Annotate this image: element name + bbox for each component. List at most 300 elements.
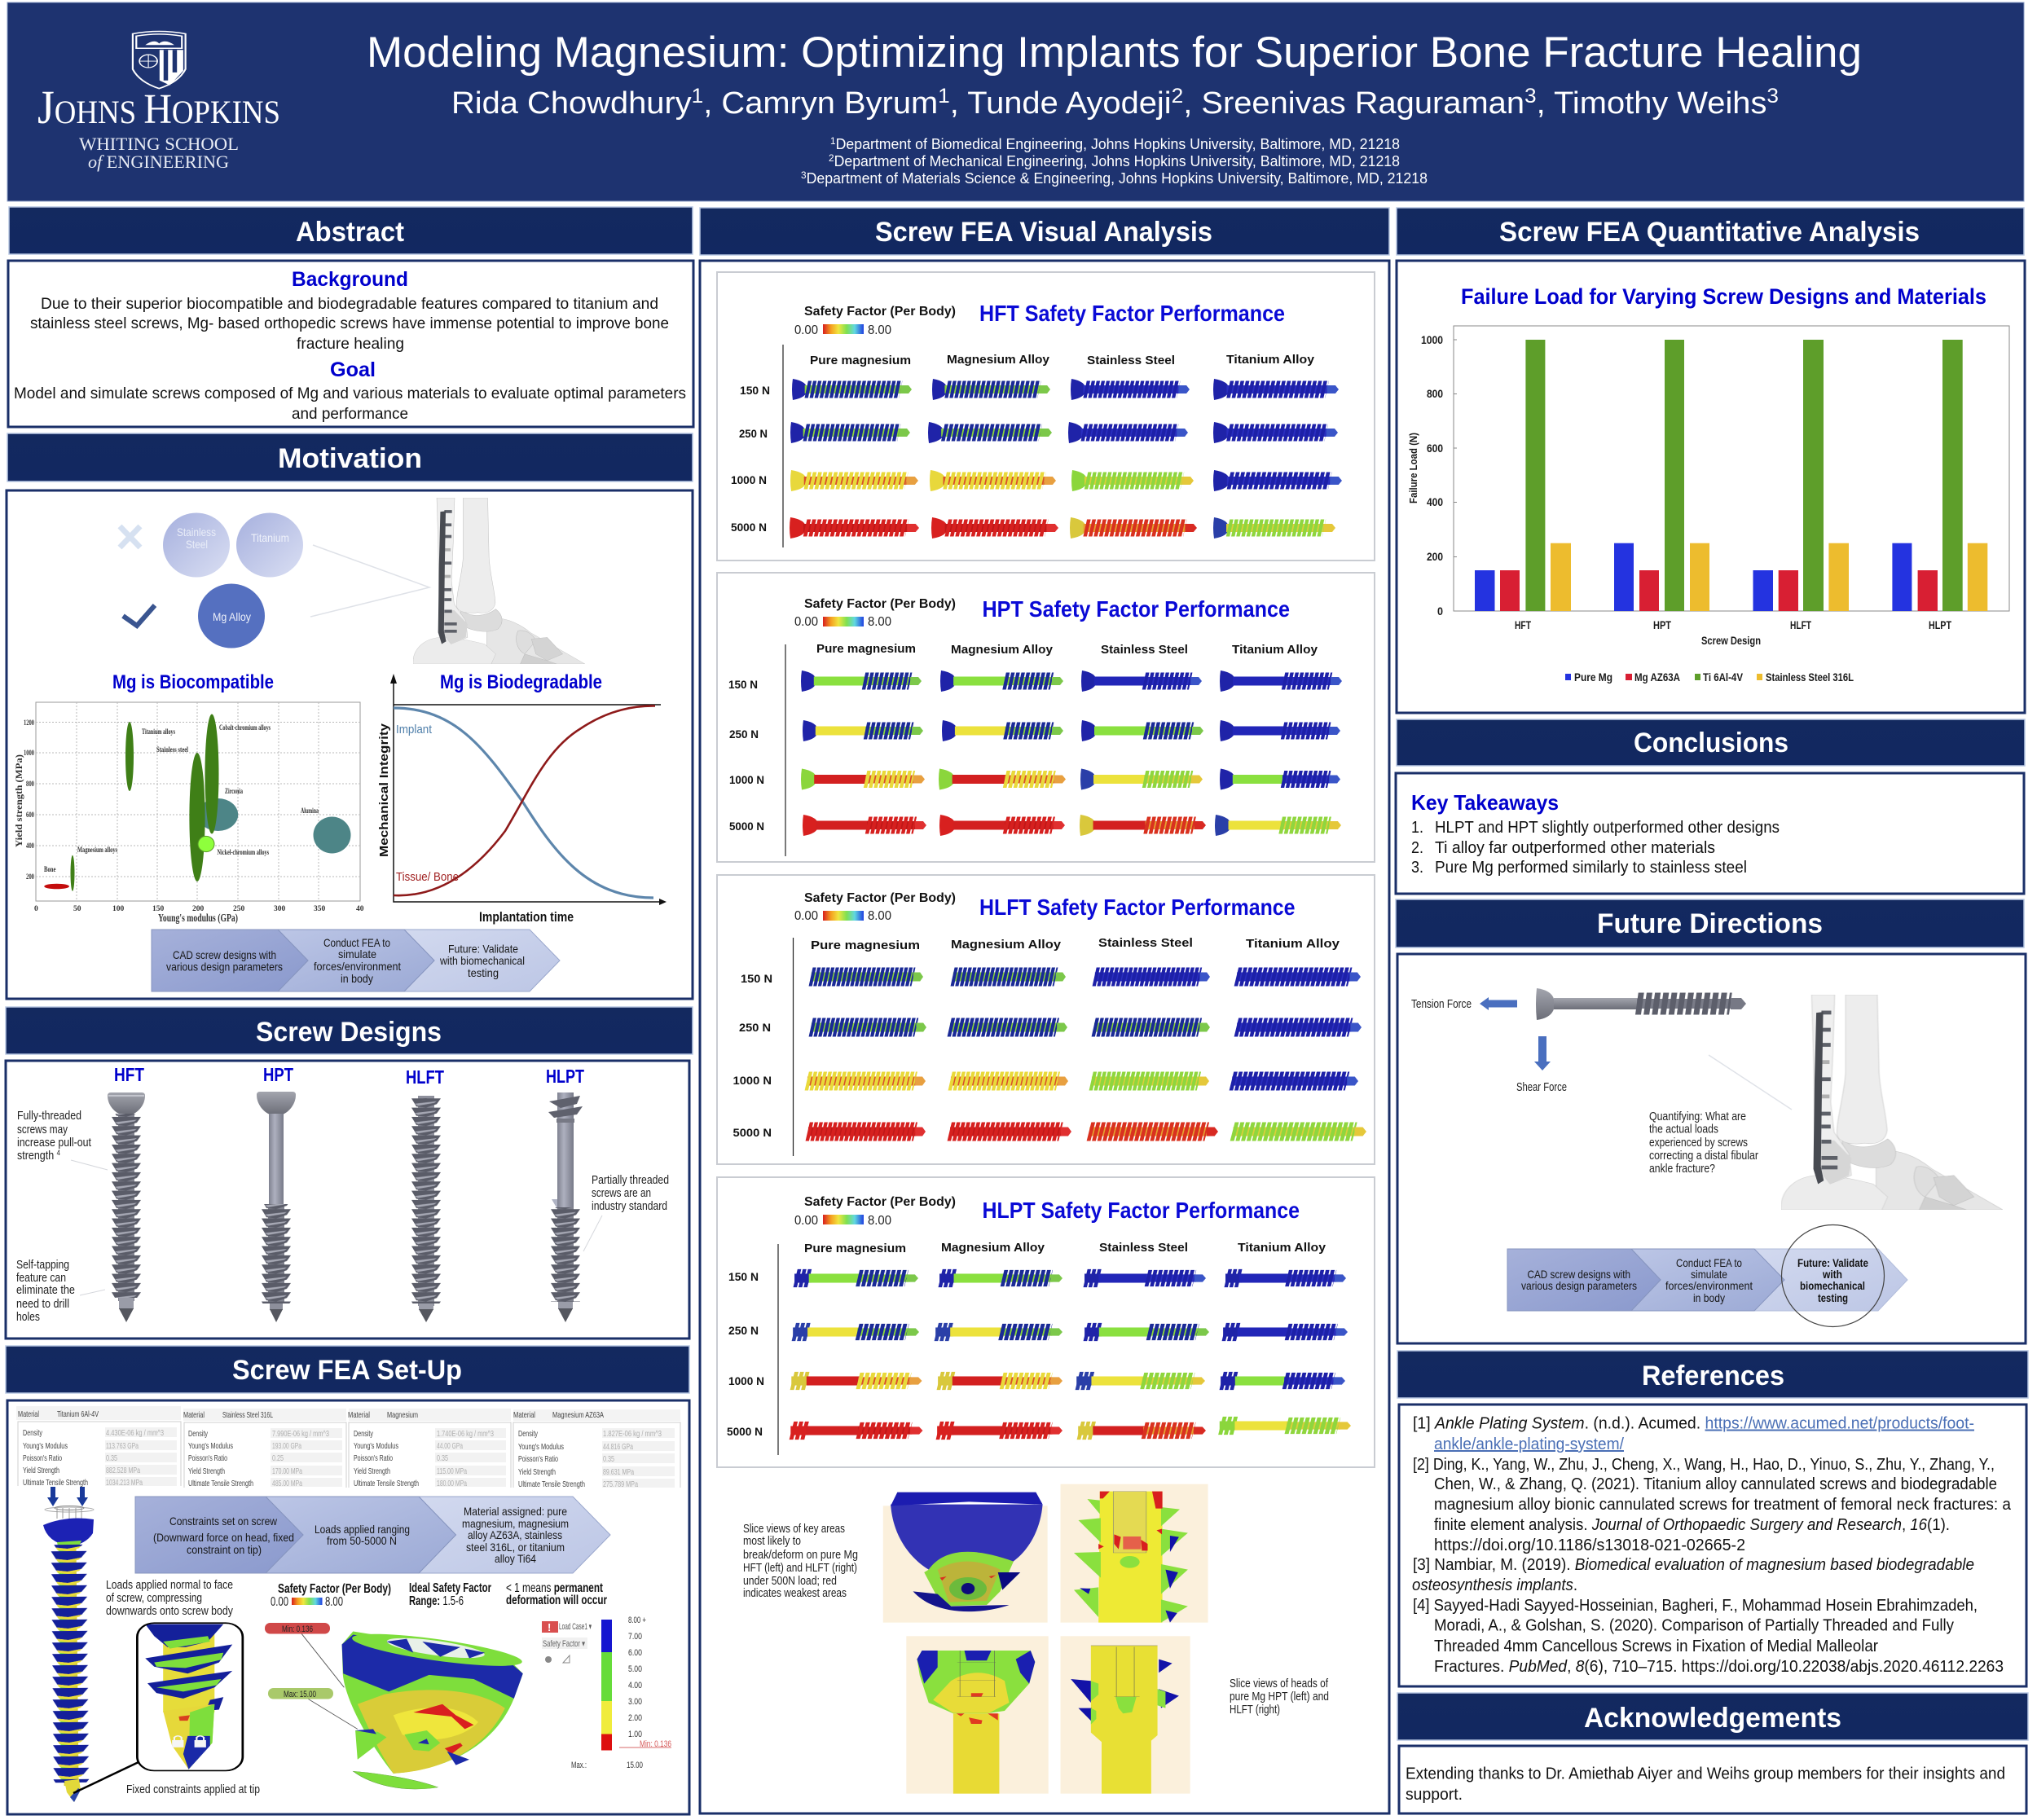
reference 4: Fractures. PubMed, 8(6), 710–715. https://doi.org/10.22038/abjs.2020.46112.2263 [1434, 1658, 2004, 1676]
chart: yield strength vs Young's modulus: 40 [356, 905, 364, 913]
process arrows with highlight: testing [1818, 1291, 1848, 1304]
screw grid [790, 379, 1342, 539]
table: stainless steel: Ultimate Tensile Strength [188, 1479, 253, 1488]
callout line [1709, 1055, 1792, 1110]
chart: failure load bars: 200 [1427, 550, 1443, 563]
table: titanium: Young's Modulus [23, 1441, 68, 1451]
chart: failure load bars: Screw Design [1701, 634, 1761, 647]
section header: Motivation: Motivation [278, 443, 422, 474]
annotation: fully-threaded: 4 [57, 1149, 60, 1157]
process arrows with highlight: biomechanical [1800, 1279, 1865, 1292]
screw grid [807, 972, 1366, 1136]
table: titanium: Material [18, 1409, 39, 1419]
legend: FEA colour scale: 2.00 [628, 1713, 642, 1723]
section header: References [1397, 1351, 2028, 1398]
icon: cross mark [120, 526, 140, 547]
legend: safety factor: 8.00 [868, 615, 891, 629]
screw: HLPT [548, 1092, 583, 1322]
legend: safety factor: Safety Factor (Per Body) [804, 597, 956, 611]
column and row labels: 250 N [728, 1325, 759, 1337]
heading: HFT Safety Factor Performance [979, 301, 1285, 326]
process arrows with highlight [1507, 1225, 1907, 1326]
table: stainless steel: Poisson's Ratio [188, 1453, 227, 1463]
process arrows: Conduct FEA to [323, 936, 390, 949]
chart: failure load bars: 800 [1427, 387, 1443, 400]
section header: Future Directions: Future Directions [1597, 908, 1823, 939]
text: quantifying question: experienced by screws [1649, 1136, 1748, 1150]
process arrows with highlight: with [1822, 1268, 1842, 1281]
affiliations: 2 [829, 152, 834, 164]
column and row labels: Titanium Alloy [1232, 644, 1318, 657]
legend: FEA colour scale: 7.00 [628, 1632, 642, 1642]
section header: References: References [1642, 1361, 1784, 1391]
text: background [30, 295, 669, 353]
text: deformation note: < 1 means permanent [506, 1581, 603, 1595]
table: stainless steel: Density [188, 1429, 209, 1439]
chart: mechanical integrity vs implantation time: Mechanical Integrity [377, 723, 391, 857]
callout lines to ankle [310, 545, 429, 617]
legend: FEA colour scale: 5.00 [628, 1664, 642, 1674]
table: stainless steel: 7.990E-06 kg / mm^3 [272, 1429, 329, 1439]
column and row labels: Titanium Alloy [1238, 1242, 1326, 1255]
text: slice views note 1: under 500N load; red [743, 1575, 837, 1588]
legend: safety factor: Safety Factor (Per Body) [278, 1582, 391, 1596]
long FEA screw [43, 1506, 94, 1802]
chart: mechanical integrity vs implantation time [377, 674, 667, 925]
sub-panel: HLPT safety factor [717, 1177, 1375, 1467]
heading: HLPT Safety Factor Performance [983, 1198, 1300, 1223]
table: magnesium: Magnesium [387, 1410, 418, 1420]
chart: yield strength vs Young's modulus: 1000 [24, 750, 34, 758]
column and row labels: Magnesium Alloy [951, 644, 1053, 657]
annotation: self-tapping: Self-tapping [16, 1259, 69, 1272]
chart: yield strength vs Young's modulus: 800 [26, 780, 34, 789]
table: magnesium: Poisson's Ratio [354, 1453, 393, 1463]
labels: screw types: HLPT [546, 1066, 584, 1087]
UI controls: load case: Safety Factor ▾ [543, 1639, 585, 1649]
table: stainless steel: Young's Modulus [188, 1441, 233, 1451]
legend: safety factor: Safety Factor (Per Body) [804, 1195, 956, 1209]
process arrows: Constraints set on screw [169, 1514, 278, 1528]
reference 3: [3] Nambiar, M. (2019). Biomedical evaluation of magnesium based biodegradable [1413, 1556, 1974, 1574]
legend: FEA colour scale: 15.00 [627, 1761, 643, 1770]
chart: failure load bars [1408, 326, 2009, 647]
list: takeaways: 3. [1411, 859, 1423, 877]
UI controls: load case: Load Case1 ▾ [559, 1622, 592, 1632]
column and row labels: 250 N [739, 428, 768, 440]
legend: safety factor: 8.00 [868, 1214, 891, 1228]
text: loads applied: Loads applied normal to face [106, 1579, 233, 1592]
heading: Mg is Biocompatible: Mg is Biocompatible [112, 671, 274, 693]
heading: Goal: Goal [330, 358, 376, 381]
text: slice views note 1: break/deform on pure Mg [743, 1549, 858, 1562]
screw: HFT [108, 1092, 145, 1322]
text: ideal safety factor: Ideal Safety Factor [409, 1581, 491, 1595]
table: stainless steel: Stainless Steel 316L [222, 1410, 273, 1420]
authors: 2 [1172, 85, 1183, 108]
table: magnesium: Density [354, 1429, 374, 1439]
legend: safety factor [271, 1582, 391, 1609]
section header: Acknowledgements: Acknowledgements [1584, 1703, 1841, 1734]
section header: Acknowledgements [1397, 1693, 2028, 1740]
chart: yield strength vs Young's modulus: 1200 [24, 719, 34, 728]
reference 3: osteosynthesis implants. [1412, 1576, 1577, 1594]
chart: yield strength vs Young's modulus: 600 [26, 811, 34, 820]
text: loads applied: downwards onto screw body [106, 1605, 234, 1618]
text: slice views note 1: most likely to [743, 1535, 801, 1548]
legend: safety factor: 8.00 [868, 323, 891, 337]
process arrows: magnesium, magnesium [462, 1517, 569, 1530]
circle: stainless steel: Steel [186, 538, 208, 551]
process arrows with highlight: forces/environment [1665, 1279, 1753, 1292]
list: takeaways: 2. [1411, 839, 1423, 857]
chart: yield strength vs Young's modulus: Titanium alloys [142, 728, 175, 736]
table: magnesium AZ63A: Yield Strength [518, 1467, 556, 1477]
table: magnesium: Ultimate Tensile Strength [354, 1479, 419, 1488]
column and row labels: 150 N [740, 385, 770, 397]
table: titanium [16, 1406, 181, 1488]
table: magnesium AZ63A: Young's Modulus [518, 1442, 564, 1452]
table: magnesium [348, 1409, 511, 1488]
circle: stainless steel [163, 513, 230, 577]
text: loads applied: of screw, compressing [106, 1592, 202, 1605]
affiliations: Department of Biomedical Engineering, Johns Hopkins University, Baltimore, MD, 21218 [836, 136, 1400, 152]
arrow: tension [1480, 997, 1517, 1010]
annotation: fully-threaded: strength [17, 1150, 59, 1163]
column and row labels [727, 1242, 1326, 1455]
legend: safety factor [794, 597, 956, 629]
logo: Johns Hopkins Whiting School of Engineering: JOHNS HOPKINS [37, 81, 280, 134]
process arrows with highlight: simulate [1691, 1268, 1727, 1281]
table: magnesium: Yield Strength [354, 1466, 390, 1476]
reference 4: Threaded 4mm Cancellous Screws in Fixation of Medial Malleolar [1434, 1638, 1878, 1655]
chart: yield strength vs Young's modulus: Zirconia [225, 788, 243, 796]
legend: materials: Mg AZ63A [1634, 670, 1680, 684]
table: stainless steel [183, 1409, 346, 1488]
legend: FEA colour scale: 8.00 + [628, 1616, 646, 1625]
text: quantifying question: correcting a distal fibular [1649, 1150, 1758, 1163]
detail: screw tip [73, 1623, 243, 1793]
legend: FEA colour scale: 4.00 [628, 1681, 642, 1690]
table: magnesium: 0.35 [437, 1453, 448, 1463]
text: slice views note 1: HFT (left) and HLFT (right) [743, 1562, 857, 1575]
chart: yield strength vs Young's modulus: Alumina [301, 807, 319, 815]
affiliations: Department of Mechanical Engineering, Johns Hopkins University, Baltimore, MD, 21218 [834, 153, 1400, 169]
chart: failure load bars: HLFT [1790, 618, 1811, 631]
affiliations: Department of Materials Science & Engineering, Johns Hopkins University, Baltimore, MD, 21218 [807, 170, 1428, 187]
labels: screw types: HLFT [406, 1066, 444, 1088]
circle: Mg alloy: Mg Alloy [213, 610, 251, 623]
text: deformation note: deformation will occur [506, 1594, 607, 1607]
chart: failure load bars: 0 [1437, 604, 1443, 618]
annotation: fully-threaded: Fully-threaded [17, 1110, 81, 1123]
table: stainless steel: Material [183, 1410, 205, 1420]
text: loads applied [106, 1579, 234, 1618]
table: titanium: Yield Strength [23, 1466, 59, 1475]
illustration: ankle plate [413, 498, 585, 664]
list: takeaways: 1. [1411, 819, 1423, 837]
text: slice views note 2: Slice views of heads of [1230, 1677, 1329, 1690]
process arrows: steel 316L, or titanium [466, 1541, 565, 1554]
process arrows: alloy Ti64 [495, 1552, 536, 1565]
section header: Conclusions [1397, 719, 2025, 766]
arrows: downward load [47, 1487, 88, 1506]
process arrows with highlight: in body [1693, 1291, 1725, 1304]
labels: screw types [114, 1064, 584, 1088]
sub-panel: HFT safety factor [717, 272, 1375, 561]
column and row labels: Magnesium Alloy [951, 939, 1061, 952]
section header: Abstract [9, 207, 693, 254]
text: goal: and performance [292, 405, 408, 423]
chart: failure load bars: 400 [1427, 495, 1443, 508]
reference 2: https://doi.org/10.1186/s13018-021-02665-2 [1434, 1536, 1745, 1554]
legend: materials [1565, 670, 1854, 684]
section header: Screw FEA Quantitative Analysis [1397, 208, 2024, 255]
column and row labels: Stainless Steel [1099, 1242, 1188, 1255]
process arrows: simulate [338, 947, 376, 961]
legend: safety factor: 0.00 [794, 323, 818, 337]
image: slice HPT head [906, 1636, 1049, 1794]
image: slice HLFT head 2 [1061, 1636, 1190, 1794]
column and row labels: Magnesium Alloy [947, 354, 1049, 367]
table: magnesium AZ63A: Density [518, 1429, 539, 1439]
process arrows with highlight: Future: Validate [1797, 1256, 1868, 1269]
table: magnesium: 115.00 MPa [437, 1466, 467, 1476]
panel: acknowledgements [1399, 1746, 2026, 1813]
section header: Screw FEA Visual Analysis [700, 208, 1389, 255]
text: ideal safety factor [409, 1581, 491, 1608]
labels: screw types: HPT [263, 1064, 293, 1085]
legend: safety factor [794, 1195, 956, 1228]
callout: min safety factor [265, 1623, 330, 1634]
legend: safety factor [794, 891, 956, 923]
chart: yield strength vs Young's modulus: 300 [274, 905, 285, 913]
table: magnesium AZ63A: Material [513, 1410, 535, 1420]
logo: Johns Hopkins Whiting School of Engineering: of ENGINEERING [88, 152, 229, 172]
chart: yield strength vs Young's modulus: 200 [192, 905, 204, 913]
column and row labels: Pure magnesium [816, 643, 916, 656]
annotation: partially threaded [583, 1174, 669, 1251]
chart: failure load bars: HLPT [1929, 618, 1951, 631]
reference 4 [1413, 1597, 2004, 1676]
column and row labels: 1000 N [731, 474, 767, 486]
chart: failure load bars: HPT [1653, 618, 1671, 631]
annotation: fully-threaded [17, 1110, 108, 1170]
circle: titanium: Titanium [251, 531, 289, 544]
legend: FEA colour scale [571, 1616, 671, 1770]
screw: HLFT [411, 1096, 442, 1322]
screw grid [801, 670, 1342, 836]
title: Modeling Magnesium: Optimizing Implants for Superior Bone Fracture Healing [367, 29, 1862, 77]
process arrows: with biomechanical [439, 954, 525, 967]
reference 1: [1] Ankle Plating System. (n.d.). Acumed. https://www.acumed.net/products/foot- [1413, 1414, 1974, 1432]
text: goal [14, 385, 686, 423]
legend: safety factor: 0.00 [794, 615, 818, 629]
UI controls: load case: ! [548, 1621, 551, 1633]
logo: Johns Hopkins Whiting School of Engineering: WHITING SCHOOL [79, 134, 239, 154]
authors: Rida Chowdhury [451, 86, 680, 121]
legend: FEA colour scale: Min: 0.136 [640, 1739, 671, 1749]
column and row labels: 150 N [741, 973, 772, 985]
column and row labels: 250 N [729, 728, 759, 741]
icon: check mark [123, 605, 155, 626]
process arrows: constraint on tip) [187, 1543, 262, 1556]
table: titanium: Ultimate Tensile Strength [23, 1478, 88, 1488]
authors: 1 [692, 85, 703, 108]
heading: Background: Background [292, 268, 408, 291]
authors: , Timothy Weihs [1537, 86, 1766, 121]
arrow: shear [1534, 1036, 1551, 1070]
legend: FEA colour scale: Max.: [571, 1761, 587, 1770]
legend: safety factor: Safety Factor (Per Body) [804, 305, 956, 319]
text: slice views note 1 [743, 1523, 858, 1600]
reference 2: finite element analysis. Journal of Orthopaedic Surgery and Research, 16(1). [1434, 1516, 1950, 1534]
column and row labels: Pure magnesium [811, 939, 920, 952]
panel: screw FEA set-up [7, 1400, 689, 1814]
section header: Future Directions [1396, 899, 2024, 947]
panel: screw designs [6, 1061, 689, 1339]
annotation: partially threaded: screws are an [592, 1187, 651, 1200]
header banner [7, 2, 2024, 201]
annotation: self-tapping: eliminate the [16, 1284, 75, 1297]
chart: yield strength vs Young's modulus: Magnesium alloys [77, 846, 117, 855]
reference 2: Chen, W., & Zhang, Q. (2021). Titanium alloy cannulated screws and biodegradable [1434, 1475, 1997, 1493]
text: deformation note [506, 1581, 607, 1607]
annotation: fully-threaded: screws may [17, 1123, 68, 1136]
column and row labels: 5000 N [731, 521, 767, 534]
table: magnesium: 44.00 GPa [437, 1441, 463, 1451]
chart: yield strength vs Young's modulus: 0 [34, 905, 38, 913]
table: titanium: 4.430E-06 kg / mm^3 [106, 1428, 164, 1438]
process arrows: alloy AZ63A, stainless [468, 1528, 562, 1541]
panel: screw FEA visual analysis [700, 261, 1389, 1813]
column and row labels: Stainless Steel [1101, 644, 1188, 657]
process arrows: forces/environment [314, 960, 401, 973]
table: stainless steel: 485.00 MPa [272, 1479, 302, 1488]
table: magnesium AZ63A: 89.631 MPa [603, 1467, 634, 1477]
chart: mechanical integrity vs implantation time: Tissue/ Bone [396, 870, 459, 884]
table: magnesium AZ63A: Ultimate Tensile Strength [518, 1479, 585, 1489]
chart: yield strength vs Young's modulus: Cobalt-chromium alloys [219, 724, 271, 732]
annotation: self-tapping [16, 1259, 105, 1324]
image: slice HLFT head [1061, 1484, 1208, 1623]
process arrows with highlight: CAD screw designs with [1527, 1268, 1630, 1281]
screw grid [790, 1273, 1351, 1435]
legend: safety factor: Safety Factor (Per Body) [804, 891, 956, 905]
heading: Mg is Biodegradable: Mg is Biodegradable [440, 671, 602, 693]
authors: 3 [1766, 85, 1779, 108]
table: titanium: 882.528 MPa [106, 1466, 140, 1475]
chart: failure load bars: 600 [1427, 442, 1443, 455]
section header: Conclusions: Conclusions [1634, 728, 1788, 758]
table: stainless steel: 193.00 GPa [272, 1441, 301, 1451]
labels: screw types: HFT [114, 1064, 144, 1085]
chart: yield strength vs Young's modulus: Stainless steel [156, 746, 188, 754]
legend: materials: Pure Mg [1574, 670, 1612, 684]
circle: Mg alloy [198, 583, 265, 648]
legend: safety factor [794, 305, 956, 337]
annotation: partially threaded: Partially threaded [592, 1174, 669, 1187]
legend: safety factor: 0.00 [271, 1595, 288, 1609]
chart: yield strength vs Young's modulus: Bone [44, 866, 55, 874]
text: background: fracture healing [297, 335, 404, 353]
section header: Screw FEA Visual Analysis: Screw FEA Visual Analysis [875, 217, 1212, 248]
column and row labels: 150 N [728, 679, 758, 691]
column and row labels [733, 937, 1340, 1156]
affiliations: 1 [830, 135, 836, 147]
sub-panel: HLFT safety factor [717, 875, 1375, 1164]
section header: Motivation [7, 433, 693, 481]
column and row labels: 5000 N [727, 1426, 763, 1438]
table: titanium: 113.763 GPa [106, 1441, 139, 1451]
callout: max safety factor: Max: 15.00 [284, 1690, 316, 1699]
image: slice HFT head [883, 1492, 1048, 1623]
list: takeaways [1411, 819, 1780, 877]
table: titanium: Poisson's Ratio [23, 1453, 62, 1463]
process arrows: Material assigned: pure [464, 1505, 567, 1518]
render: FEA of screw head [301, 1628, 526, 1789]
chart: yield strength vs Young's modulus: 50 [73, 905, 81, 913]
text: quantifying question: the actual loads [1649, 1123, 1718, 1136]
chart: yield strength vs Young's modulus: 400 [26, 842, 34, 851]
process arrows: in body [341, 972, 373, 985]
text: slice views note 2: pure Mg HPT (left) and [1230, 1690, 1329, 1704]
text: goal: Model and simulate screws composed of Mg and various materials to evaluate optimal parameters [14, 385, 686, 402]
chart: failure load bars: HFT [1515, 618, 1531, 631]
annotation: self-tapping: need to drill [16, 1298, 69, 1311]
heading: key takeaways: Key Takeaways [1411, 790, 1559, 815]
table: magnesium AZ63A: 1.827E-06 kg / mm^3 [603, 1429, 662, 1439]
chart: yield strength vs Young's modulus: 100 [112, 905, 124, 913]
legend: safety factor: 0.00 [794, 909, 818, 923]
table: titanium: Density [23, 1428, 43, 1438]
reference 2 [1413, 1456, 2012, 1554]
authors: 3 [1524, 85, 1537, 108]
chart: yield strength vs Young's modulus: 350 [314, 905, 326, 913]
panel: quantitative analysis [1397, 261, 2025, 713]
reference 4: Moradi, A., & Golshan, S. (2020). Comparison of Partially Threaded and Fully [1434, 1616, 1954, 1634]
authors: , Tunde Ayodeji [950, 86, 1172, 121]
sub-panel: HPT safety factor [717, 573, 1375, 862]
legend: materials: Ti 6Al-4V [1703, 670, 1744, 684]
chart: yield strength vs Young's modulus: Yield strength (MPa) [13, 754, 24, 847]
section header: Screw FEA Set-Up: Screw FEA Set-Up [232, 1355, 462, 1386]
callout: min safety factor: Min: 0.136 [282, 1624, 313, 1634]
column and row labels: 5000 N [733, 1127, 772, 1139]
table: magnesium: 180.00 MPa [437, 1479, 467, 1488]
text: quantifying question: ankle fracture? [1649, 1163, 1715, 1176]
column and row labels: Titanium Alloy [1246, 938, 1340, 951]
chart: yield strength vs Young's modulus: Nickel-chromium alloys [217, 849, 269, 857]
label: tension force: Tension Force [1411, 998, 1472, 1011]
panel: motivation [7, 490, 693, 999]
logo: Johns Hopkins Whiting School of Engineering [37, 32, 280, 172]
chart: yield strength vs Young's modulus: 150 [152, 905, 165, 913]
legend: FEA colour scale: 3.00 [628, 1697, 642, 1707]
annotation: self-tapping: feature can [16, 1272, 66, 1285]
table: magnesium AZ63A: 275.789 MPa [603, 1479, 638, 1489]
authors: 1 [938, 85, 950, 108]
callout: max safety factor [268, 1688, 333, 1699]
text: ideal safety factor: Range: 1.5-6 [409, 1594, 464, 1608]
caption: fixed constraints: Fixed constraints applied at tip [126, 1783, 260, 1796]
process arrows: CAD screw designs with [173, 948, 276, 961]
legend: FEA colour scale: 6.00 [628, 1648, 642, 1658]
table: titanium: 0.35 [106, 1453, 117, 1463]
table: magnesium: Material [348, 1410, 370, 1420]
section header: Screw FEA Quantitative Analysis: Screw FEA Quantitative Analysis [1499, 217, 1920, 248]
table: magnesium AZ63A: Poisson's Ratio [518, 1454, 558, 1464]
